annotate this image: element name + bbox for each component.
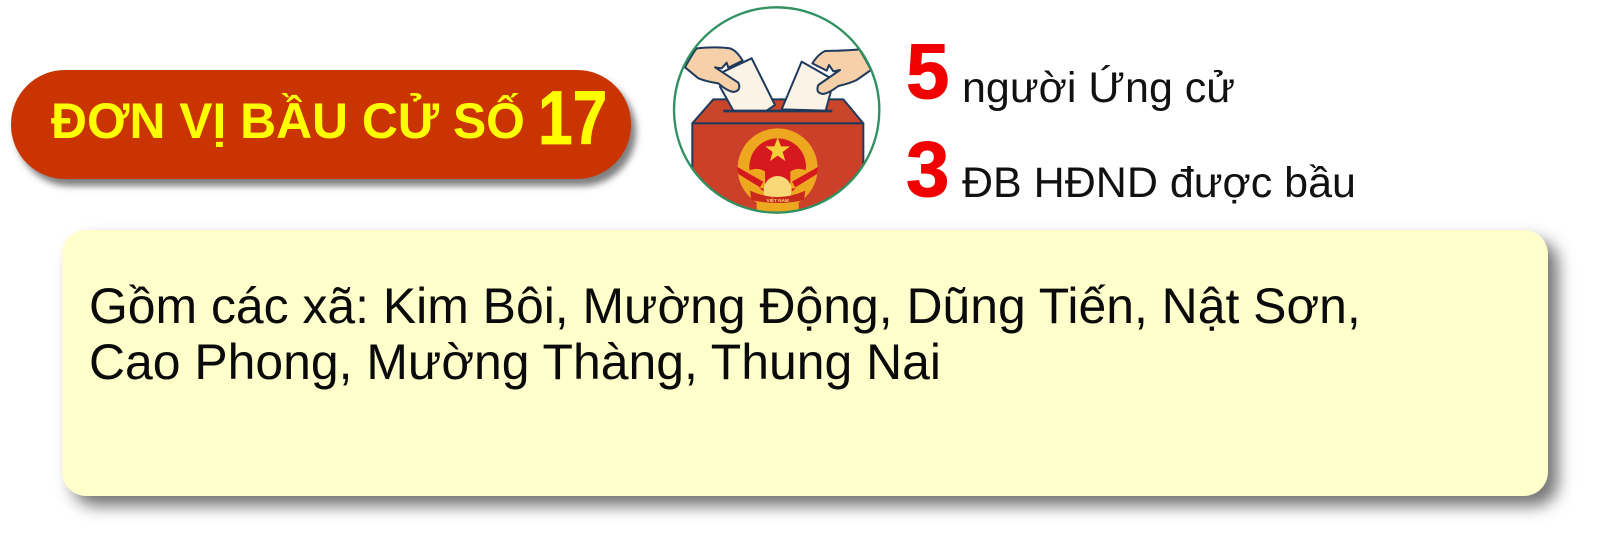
emblem: VIỆT NAM	[767, 196, 789, 203]
commune list text: Cao Phong, Mường Thàng, Thung Nai	[89, 334, 941, 390]
stat: elected delegates	[906, 125, 1356, 213]
panel: commune list	[62, 230, 1548, 496]
ballot box body	[692, 99, 863, 223]
commune list text	[89, 278, 1361, 390]
panel: title pill	[11, 70, 631, 179]
label delegates: ĐB HĐND được bầu	[962, 159, 1356, 207]
icon: ballot box	[672, 6, 880, 214]
emblem	[737, 128, 819, 213]
commune list text: Gồm các xã: Kim Bôi, Mường Động, Dũng Tiến, Nật Sơn,	[89, 278, 1361, 334]
ballots and hands	[685, 47, 871, 111]
label candidates: người Ứng cử	[962, 64, 1235, 112]
title text: ĐƠN VỊ BẦU CỬ SỐ	[51, 93, 525, 149]
number 5: 5	[906, 27, 949, 115]
stat: candidates	[906, 27, 1235, 115]
unit number: 17	[538, 76, 607, 161]
number 3: 3	[906, 125, 949, 213]
